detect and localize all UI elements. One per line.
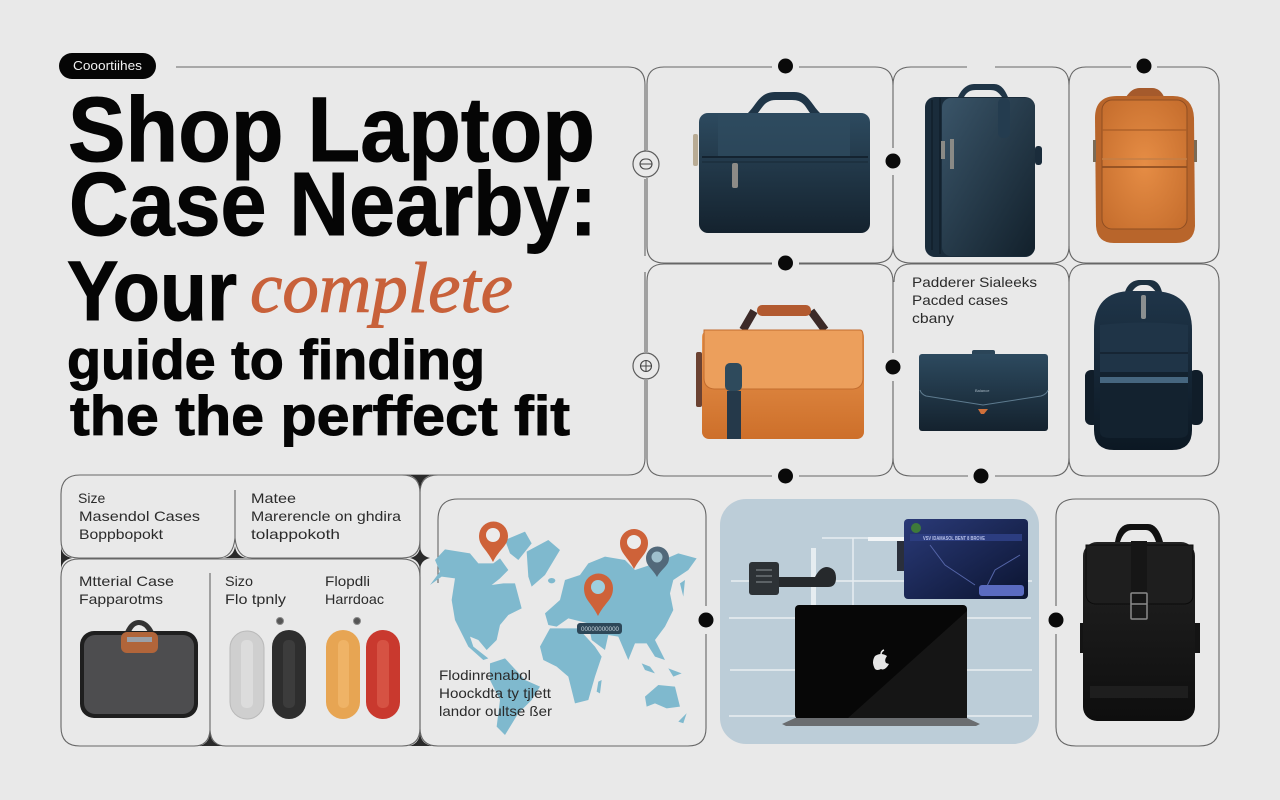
text: size and material: Matee xyxy=(251,490,296,506)
title frame lines xyxy=(80,67,645,475)
product: navy briefcase xyxy=(693,92,870,233)
title xyxy=(67,79,597,447)
title: Shop Laptop xyxy=(68,79,595,181)
title: Your xyxy=(67,244,237,338)
icon: open circle lower xyxy=(633,353,659,379)
connector dots xyxy=(698,58,1152,628)
map pins: 00000000000 xyxy=(581,627,620,633)
text: size and material: tolappokoth xyxy=(251,526,340,542)
caption: map: landor oultse ßer xyxy=(439,703,552,719)
title: Case Nearby: xyxy=(69,155,597,255)
product: navy tall case xyxy=(925,84,1042,257)
caption: padded cases: Pacded cases xyxy=(912,292,1008,308)
caption: map xyxy=(439,667,552,719)
map pins xyxy=(479,522,669,634)
text: material, size, rigid: Sizo xyxy=(225,573,253,589)
product: navy backpack xyxy=(1085,280,1203,450)
corner wedges xyxy=(61,475,432,746)
text: material, size, rigid: Flo tpnly xyxy=(225,591,286,607)
product: navy envelope sleeve: Balance xyxy=(975,388,990,393)
product: grey padded case xyxy=(80,620,198,718)
title: guide to finding xyxy=(67,328,485,391)
text: material, size, rigid: Fapparotms xyxy=(79,591,163,607)
product grid frames xyxy=(647,67,1219,476)
title: the the perffect fit xyxy=(70,384,570,447)
product: navy envelope sleeve xyxy=(919,350,1048,431)
tablet map screen xyxy=(897,519,1028,599)
text: material, size, rigid xyxy=(79,573,384,607)
world map xyxy=(430,532,697,735)
title: complete xyxy=(250,248,513,328)
text: material, size, rigid: Flopdli xyxy=(325,573,370,589)
product: colour swatch pills xyxy=(230,618,400,719)
caption: map: Hoockdta ty tjlett xyxy=(439,685,551,701)
filter panels: frames xyxy=(61,475,706,746)
product: orange backpack xyxy=(1093,88,1197,243)
adapter device xyxy=(749,562,836,595)
tablet map screen: VSV IDAMASOL BENT 8 BROVE xyxy=(923,536,985,542)
category pill: Cooortiihes xyxy=(73,58,143,73)
text: size and material: Boppbopokt xyxy=(79,526,163,542)
text: size and material: Size xyxy=(78,490,105,506)
text: material, size, rigid: Mtterial Case xyxy=(79,573,174,589)
text: size and material xyxy=(78,490,401,542)
text: material, size, rigid: Harrdoac xyxy=(325,591,384,607)
text: size and material: Masendol Cases xyxy=(79,508,200,524)
panel: black backpack xyxy=(1056,499,1219,746)
panel: blue device scene xyxy=(720,499,1039,744)
caption: map: Flodinrenabol xyxy=(439,667,531,683)
icon: open circle upper xyxy=(633,151,659,177)
caption: padded cases: cbany xyxy=(912,310,954,326)
caption: padded cases: Padderer Sialeeks xyxy=(912,274,1037,290)
laptop xyxy=(782,605,980,726)
product: orange briefcase xyxy=(696,305,864,439)
text: size and material: Marerencle on ghdira xyxy=(251,508,401,524)
caption: padded cases xyxy=(912,274,1037,326)
category pill xyxy=(59,53,156,79)
